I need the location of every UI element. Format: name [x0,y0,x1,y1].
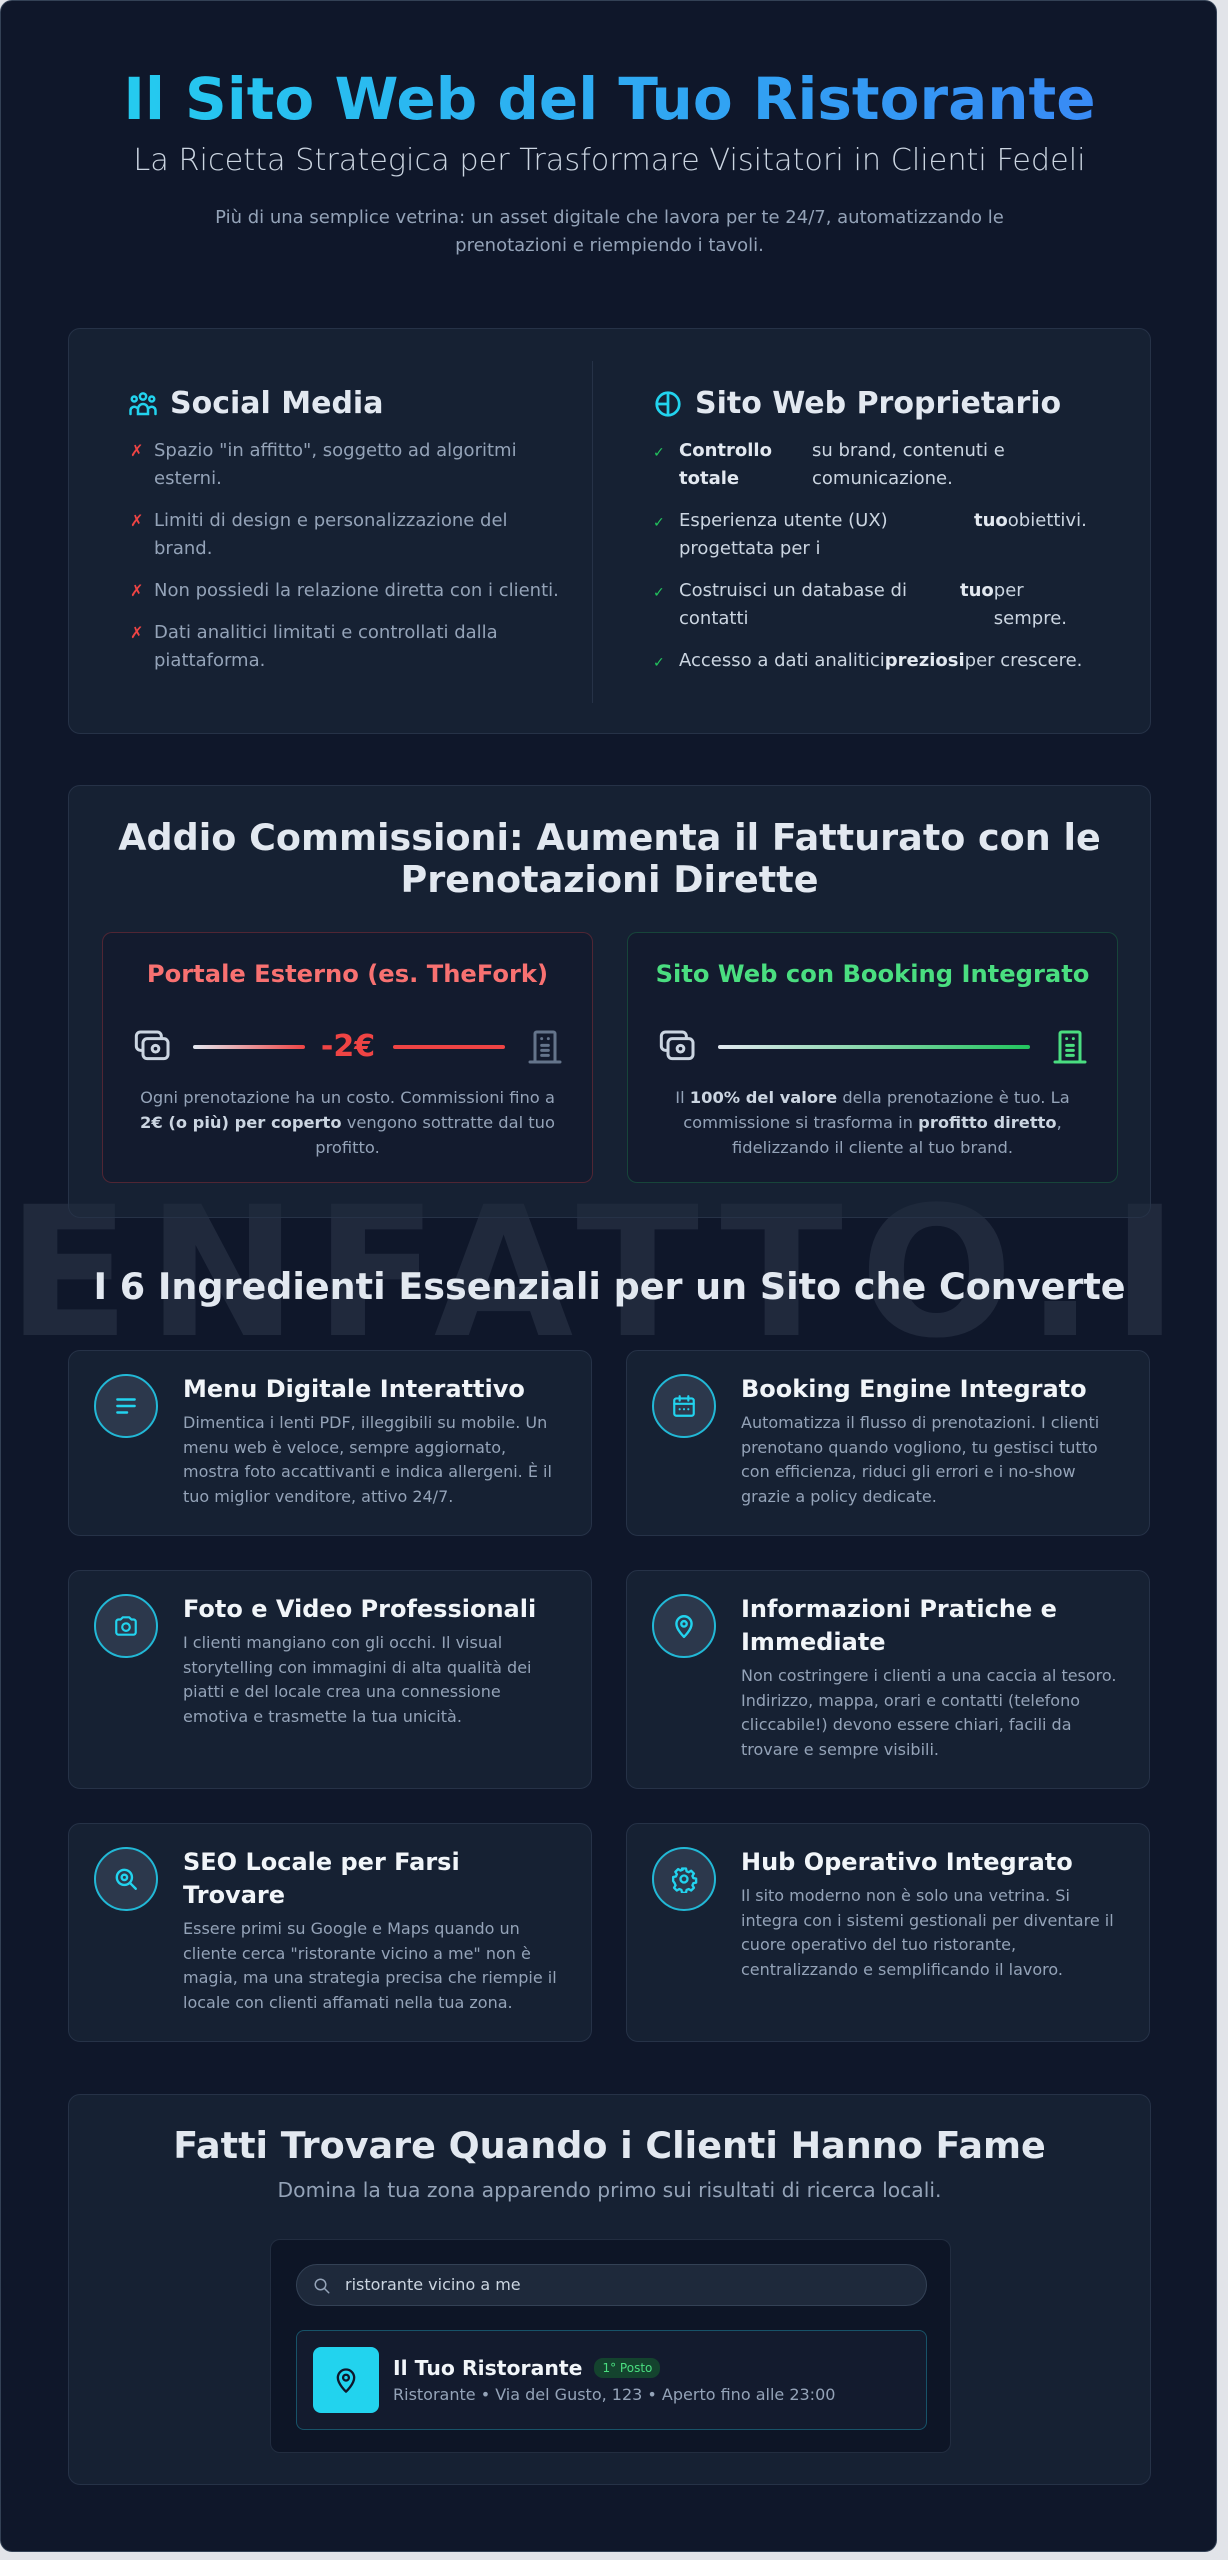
list: sito pros: per [994,580,1024,601]
list: social cons: brand. [154,538,212,559]
icon: menu [94,1374,158,1438]
icon row: commission flow: -2€ [321,1029,375,1064]
card: seo locale: Essere primi su Google e Maps quando un cliente cerca "ristorante vicino a me" non è magia, ma una strategia precisa che riempie il locale con clienti affamati nella tua zona. [183,1919,557,2012]
card: foto e video: Foto e Video Professionali [183,1595,536,1623]
list: sito pros: ✓ [653,445,665,461]
list: social cons: ✗ [130,623,143,642]
list: sito pros: Esperienza utente (UX) [679,510,888,531]
card: hub operativo: Il sito moderno non è solo una vetrina. Si integra con i sistemi gestionali per diventare il cuore operativo del tuo ristorante, centralizzando e semplificando il lavoro. [741,1886,1114,1978]
card: menu digitale: Dimentica i lenti PDF, illeggibili su mobile. Un menu web è veloce, sempre aggiornato, mostra foto accattivanti e indica allergeni. È il tuo miglior venditore, attivo 24/7. [183,1413,552,1506]
list: sito pros: ✓ [653,655,665,671]
card: portale esterno: Portale Esterno (es. TheFork) [147,960,548,988]
list: sito pros: progettata per i [679,538,821,559]
card: menu digitale: Menu Digitale Interattivo [183,1375,525,1403]
heading: commissioni: Addio Commissioni: Aumenta il Fatturato con le [118,816,1101,859]
search mockup [270,2239,951,2453]
card: seo locale [68,1823,592,2042]
watermark: ENFATTO.I [7,1169,1195,1378]
card: booking integrato [627,932,1118,1183]
badge: 1° Posto [602,2361,652,2375]
card: booking integrato: Sito Web con Booking Integrato [656,960,1089,988]
intro text: Più di una semplice vetrina: un asset digitale che lavora per te 24/7, automatizzando le prenotazioni e riempiendo i tavoli. [215,207,1004,256]
card: booking engine: Automatizza il flusso di prenotazioni. I clienti prenotano quando vogliono, tu gestisci tutto con efficienza, riduci gli errori e i no-show grazie a policy dedicate. [741,1413,1099,1506]
column: social media [129,386,559,671]
list: sito pros: preziosi [885,650,965,671]
card: hub operativo [626,1823,1150,2042]
card: portale esterno [102,932,593,1183]
icon: camera [94,1594,158,1658]
list: sito pros: contatti [679,608,749,629]
list: sito pros: sempre. [994,608,1067,629]
list: social cons: Non possiedi la relazione diretta con i clienti. [154,580,559,601]
card: portale esterno: 2€ (o più) per coperto vengono sottratte dal tuo [140,1113,555,1132]
card: portale esterno: Ogni prenotazione ha un costo. Commissioni fino a [140,1088,555,1107]
search result: Il Tuo Ristorante [393,2356,582,2380]
heading: sito: Sito Web Proprietario [695,386,1061,421]
search bar: ristorante vicino a me [345,2275,521,2294]
heading: commissioni [118,816,1101,901]
list: sito pros: ✓ [653,515,665,531]
list: social cons: esterni. [154,468,222,489]
card: booking integrato: commissione si trasforma in profitto diretto, [683,1113,1062,1132]
list: sito pros [653,440,1087,671]
card: booking integrato: Il 100% del valore della prenotazione è tuo. La [675,1088,1070,1107]
card: foto e video [68,1570,592,1789]
card: booking engine: Booking Engine Integrato [741,1375,1087,1403]
list: sito pros: Controllo [679,440,772,461]
heading: fatti trovare: Fatti Trovare Quando i Clienti Hanno Fame [173,2124,1046,2167]
card: seo locale: SEO Locale per Farsi Trovare [183,1848,460,1909]
panel: social vs sito [68,328,1151,734]
search bar [296,2264,927,2306]
heading: 6 ingredienti: I 6 Ingredienti Essenziali per un Sito che Converte [93,1265,1126,1308]
list: social cons: ✗ [130,511,143,530]
list: sito pros: Accesso a dati analitici [679,650,885,671]
title: Il Sito Web del Tuo Ristorante [123,65,1096,133]
list: sito pros: Costruisci un database di [679,580,907,601]
panel: commissioni [68,785,1151,1218]
list: sito pros: ✓ [653,585,665,601]
card: foto e video: I clienti mangiano con gli occhi. Il visual storytelling con immagini di alta qualità dei piatti e del locale crea una connessione emotiva e trasmette la tua unicità. [183,1633,532,1726]
icon: map pin [652,1594,716,1658]
column: sito proprietario [653,386,1087,671]
badge [594,2358,660,2378]
list: social cons [130,440,559,671]
list: social cons: ✗ [130,581,143,600]
list: sito pros: su brand, contenuti e [812,440,1005,461]
card: informazioni pratiche [626,1570,1150,1789]
card: hub operativo: Hub Operativo Integrato [741,1848,1073,1876]
icon row: commission flow [134,1029,562,1064]
list: sito pros: obiettivi. [1008,510,1087,531]
search result [296,2330,927,2430]
list: sito pros: comunicazione. [812,468,953,489]
subtitle: fatti trovare: Domina la tua zona apparendo primo sui risultati di ricerca locali. [278,2178,941,2202]
list: social cons: Limiti di design e personalizzazione del [154,510,508,531]
heading: social media: Social Media [170,386,383,421]
heading: commissioni: Prenotazioni Dirette [401,858,818,901]
list: social cons: piattaforma. [154,650,265,671]
card: menu digitale [68,1350,592,1536]
list: sito pros: totale [679,468,739,489]
icon row: direct flow [660,1030,1086,1064]
list: social cons: ✗ [130,441,143,460]
list: sito pros: tuo [974,510,1008,531]
card: informazioni pratiche: Informazioni Pratiche e Immediate [741,1595,1057,1656]
search result: Ristorante • Via del Gusto, 123 • Aperto fino alle 23:00 [393,2385,835,2404]
list: sito pros: per crescere. [965,650,1082,671]
icon: calendar [652,1374,716,1438]
list: social cons: Dati analitici limitati e controllati dalla [154,622,498,643]
list: sito pros: tuo [960,580,994,601]
subtitle: La Ricetta Strategica per Trasformare Visitatori in Clienti Fedeli [133,143,1086,178]
card: portale esterno: profitto. [315,1138,380,1157]
panel: fatti trovare [68,2094,1151,2485]
card: booking engine [626,1350,1150,1536]
icon: gear [652,1847,716,1911]
icon: pin tile [313,2347,379,2413]
list: social cons: Spazio "in affitto", soggetto ad algoritmi [154,440,517,461]
card: booking integrato: fidelizzando il cliente al tuo brand. [732,1138,1013,1157]
icon: search [94,1847,158,1911]
card: informazioni pratiche: Non costringere i clienti a una caccia al tesoro. Indirizzo, mappa, orari e contatti (telefono cliccabile!) devono essere chiari, facili da trovare e sempre visibili. [741,1666,1116,1758]
